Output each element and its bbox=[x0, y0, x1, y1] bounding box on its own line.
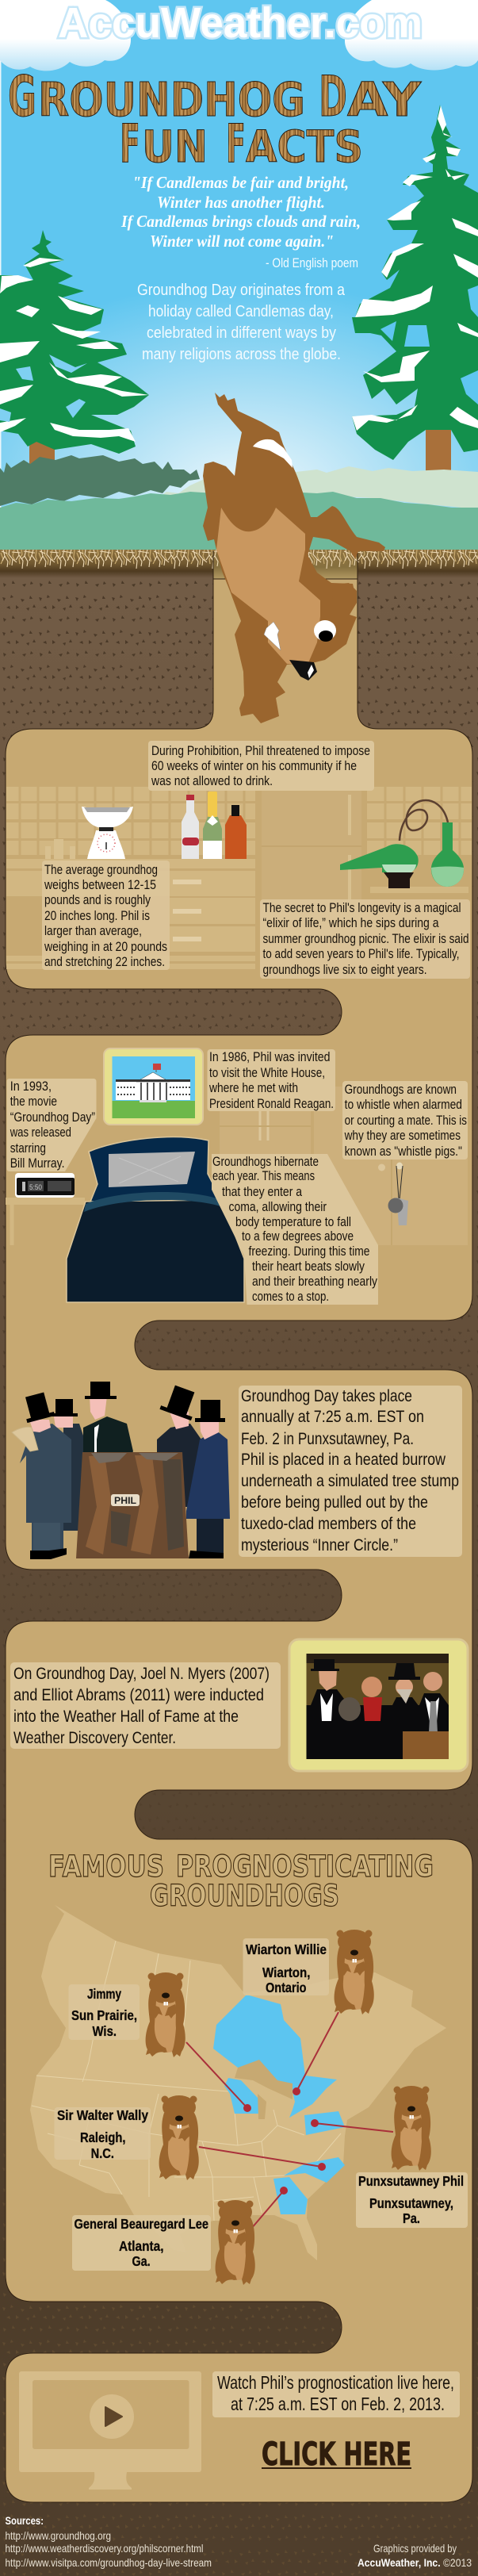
title: Groundhog Day Fun Facts: ACTS bbox=[246, 121, 363, 172]
label: Sir Walter Wally bbox=[54, 2107, 151, 2161]
picture: White House bbox=[104, 1048, 203, 1125]
text box: watch live bbox=[212, 2371, 460, 2417]
label: Punxsutawney Phil bbox=[356, 2172, 468, 2228]
Wisconsin bbox=[224, 2078, 262, 2114]
text box: elixir of life: “elixir of life,” which he sips during a bbox=[263, 916, 439, 930]
cloud: top left bbox=[0, 0, 131, 71]
quote: Old English poem: - Old English poem bbox=[266, 255, 358, 270]
text box: average groundhog bbox=[42, 861, 170, 970]
icon: whistle bbox=[388, 1163, 408, 1225]
text box: average groundhog: 20 inches long. Phil is bbox=[44, 909, 150, 923]
text box: Hall of Fame bbox=[10, 1662, 281, 1749]
text box: prohibition: was not allowed to drink. bbox=[151, 774, 273, 788]
credit: Graphics provided by bbox=[373, 2542, 457, 2555]
text box: Hall of Fame: into the Weather Hall of Fame at the bbox=[13, 1707, 239, 1726]
heading: Famous Prognosticating Groundhogs bbox=[48, 1850, 434, 1913]
tree: right bbox=[352, 105, 478, 476]
text box: average groundhog: and stretching 22 inches. bbox=[44, 955, 165, 969]
Great Lakes bbox=[235, 2060, 293, 2099]
label: Jimmy: Sun Prairie, bbox=[71, 2007, 137, 2023]
groundhog: Punxsutawney Phil bbox=[392, 2086, 431, 2171]
sky background bbox=[0, 0, 478, 555]
title: Groundhog Day Fun Facts: AY bbox=[347, 72, 422, 127]
sources: http://www.visitpa.com/groundhog-day-live-stream bbox=[5, 2556, 212, 2569]
text box: movie 1993: Bill Murray. bbox=[10, 1156, 65, 1171]
illustration: Inner Circle men and stump bbox=[12, 1382, 230, 1559]
icon: elixir flasks bbox=[340, 800, 464, 888]
text box: elixir of life bbox=[260, 899, 470, 979]
hog tail tuft bbox=[253, 439, 293, 468]
Pennsylvania bbox=[304, 2111, 345, 2135]
title: Groundhog Day Fun Facts: D bbox=[319, 64, 347, 129]
intro text: celebrated in different ways by bbox=[147, 324, 336, 342]
man 1 with scroll bbox=[12, 1391, 71, 1559]
title: Groundhog Day Fun Facts: G bbox=[8, 64, 36, 129]
text box: movie 1993: “Groundhog Day” bbox=[10, 1110, 95, 1125]
hills bbox=[0, 455, 478, 551]
bed bbox=[67, 1137, 244, 1302]
text box: whistle pigs bbox=[342, 1081, 468, 1160]
label: General Beauregard Lee: General Beauregard Lee bbox=[75, 2216, 208, 2232]
groundhog: Jimmy bbox=[146, 1972, 185, 2057]
text box: hibernation: to a few degrees above bbox=[242, 1229, 354, 1244]
label: Jimmy: Wis. bbox=[92, 2023, 117, 2039]
text box: movie 1993: In 1993, bbox=[10, 1079, 52, 1094]
man 3 center bbox=[83, 1382, 133, 1455]
text box: average groundhog: larger than average, bbox=[44, 924, 142, 938]
icon: video monitor bbox=[19, 2371, 201, 2490]
label: Wiarton Willie bbox=[243, 1938, 329, 1995]
text box: White House 1986: where he met with bbox=[208, 1081, 298, 1095]
text box: average groundhog: The average groundhog bbox=[44, 863, 158, 877]
sources bbox=[5, 2515, 212, 2569]
bedroom background furniture bbox=[6, 1087, 468, 1245]
title: Groundhog Day Fun Facts: UN bbox=[142, 121, 208, 172]
label: Wiarton Willie: Wiarton Willie bbox=[246, 1942, 327, 1957]
link: click here: CLICK HERE bbox=[262, 2436, 411, 2473]
text box: White House 1986: President Ronald Reagan. bbox=[209, 1097, 334, 1111]
heading: Famous Prognosticating Groundhogs: GROUNDHOGS bbox=[150, 1879, 339, 1913]
label: Jimmy: Jimmy bbox=[87, 1986, 121, 2002]
text box: Groundhog Day takes place: before being pulled out by the bbox=[241, 1493, 428, 1512]
intro text bbox=[137, 282, 346, 363]
text box: hibernation: Groundhogs hibernate bbox=[212, 1155, 319, 1169]
label: General Beauregard Lee: Ga. bbox=[132, 2253, 151, 2269]
quote: Old English poem bbox=[120, 173, 361, 270]
text box: hibernation bbox=[212, 1154, 378, 1305]
label: PHIL: PHIL bbox=[114, 1495, 136, 1506]
shaft walls bbox=[213, 551, 358, 580]
photo: Hall of Fame induction bbox=[289, 1639, 468, 1771]
text box: prohibition: During Prohibition, Phil threatened to impose bbox=[151, 744, 370, 758]
sources: http://www.weatherdiscovery.org/philscorner.html bbox=[5, 2542, 203, 2555]
text box: Groundhog Day takes place: Feb. 2 in Punxsutawney, Pa. bbox=[241, 1429, 414, 1448]
text box: hibernation: comes to a stop. bbox=[252, 1290, 329, 1304]
text box: White House 1986: to visit the White House, bbox=[209, 1066, 325, 1080]
AccuWeather logo: AccuWeather.com bbox=[58, 0, 423, 47]
icon: kitchen scale bbox=[82, 807, 133, 859]
text box: average groundhog: weighs between 12-15 bbox=[44, 878, 156, 892]
kitchen background bbox=[6, 785, 472, 969]
label: Sir Walter Wally: Raleigh, bbox=[80, 2129, 125, 2145]
text box: hibernation: coma, allowing their bbox=[228, 1200, 327, 1214]
groundhog Phil diving into burrow bbox=[203, 393, 385, 723]
groundhog: Wiarton Willie bbox=[335, 1930, 374, 2014]
text box: elixir of life: groundhogs live six to eight years. bbox=[263, 963, 426, 977]
label: General Beauregard Lee: Atlanta, bbox=[119, 2238, 163, 2254]
text box: hibernation: their heart beats slowly bbox=[252, 1259, 365, 1274]
intro text: Groundhog Day originates from a bbox=[137, 282, 346, 299]
callout lines and location dots bbox=[186, 2012, 393, 2229]
title: Groundhog Day Fun Facts: F bbox=[120, 113, 140, 174]
hog ear bbox=[332, 583, 357, 611]
credit bbox=[358, 2542, 472, 2569]
credit: AccuWeather, Inc. ©2013 bbox=[358, 2556, 472, 2569]
quote: Old English poem: "If Candlemas be fair and bright, bbox=[132, 173, 349, 192]
text box: White House 1986 bbox=[208, 1049, 335, 1111]
Lake Michigan bbox=[258, 2094, 266, 2119]
label: Wiarton Willie: Wiarton, bbox=[262, 1965, 311, 1980]
quote: Old English poem: Winter will not come again." bbox=[150, 232, 334, 251]
icon: alarm clock: 5:50 bbox=[29, 1183, 42, 1191]
intro text: many religions across the globe. bbox=[142, 346, 341, 363]
text box: average groundhog: pounds and is roughly bbox=[44, 893, 151, 907]
text box: Hall of Fame: Weather Discovery Center. bbox=[13, 1728, 176, 1747]
sources: Sources: bbox=[5, 2515, 44, 2527]
North Carolina bbox=[284, 2157, 345, 2183]
cloud: top right bbox=[345, 0, 478, 70]
man 4 bbox=[157, 1383, 201, 1507]
text box: average groundhog: weighing in at 20 pounds bbox=[44, 940, 167, 954]
text box: prohibition: 60 weeks of winter on his community if he bbox=[151, 759, 357, 773]
text box: White House 1986: In 1986, Phil was invited bbox=[209, 1050, 330, 1064]
label: Punxsutawney Phil: Pa. bbox=[403, 2210, 420, 2226]
text box: whistle pigs: Groundhogs are known bbox=[345, 1083, 457, 1097]
text box: Groundhog Day takes place: annually at 7:25 a.m. EST on bbox=[241, 1407, 424, 1426]
text box: movie 1993: the movie bbox=[10, 1094, 57, 1109]
label: Sir Walter Wally: Sir Walter Wally bbox=[57, 2107, 148, 2123]
text box: Hall of Fame: On Groundhog Day, Joel N. Myers (2007) bbox=[13, 1664, 270, 1683]
icon: bottles bbox=[182, 792, 247, 859]
heading: Famous Prognosticating Groundhogs: FAMOUS bbox=[48, 1850, 164, 1884]
label: Wiarton Willie: Ontario bbox=[266, 1980, 306, 1995]
hog eye bbox=[314, 620, 336, 642]
title: Groundhog Day Fun Facts bbox=[8, 64, 422, 174]
text box: hibernation: and their breathing nearly bbox=[252, 1275, 378, 1289]
text box: Groundhog Day takes place bbox=[239, 1386, 462, 1557]
text box: hibernation: body temperature to fall bbox=[235, 1215, 351, 1229]
text box: movie 1993 bbox=[6, 1079, 97, 1171]
burrow tunnels bbox=[6, 579, 472, 2502]
text box: hibernation: freezing. During this time bbox=[249, 1244, 369, 1259]
quote: Old English poem: If Candlemas brings clouds and rain, bbox=[120, 212, 361, 231]
label: Punxsutawney Phil: Punxsutawney, bbox=[369, 2195, 453, 2211]
label: Jimmy bbox=[68, 1984, 140, 2040]
sources: http://www.groundhog.org bbox=[5, 2529, 111, 2542]
map: North America bbox=[30, 1905, 446, 2260]
text box: Groundhog Day takes place: tuxedo-clad members of the bbox=[241, 1514, 416, 1533]
title: Groundhog Day Fun Facts: F bbox=[226, 113, 246, 174]
tree stump bbox=[76, 1452, 189, 1558]
man 2 bbox=[51, 1399, 87, 1531]
intro text: holiday called Candlemas day, bbox=[148, 303, 334, 320]
text box: Groundhog Day takes place: mysterious “Inner Circle.” bbox=[241, 1535, 398, 1554]
tree: left bbox=[0, 230, 149, 466]
text box: movie 1993: starring bbox=[10, 1141, 46, 1156]
title: Groundhog Day Fun Facts: ROUNDHOG bbox=[38, 72, 305, 127]
icon: alarm clock bbox=[15, 1173, 75, 1198]
hog nose bbox=[289, 660, 317, 680]
man 5 bbox=[186, 1400, 230, 1558]
groundhog: Sir Walter Wally bbox=[159, 2095, 199, 2180]
quote: Old English poem: Winter has another flight. bbox=[157, 193, 325, 212]
Ontario bbox=[213, 1995, 337, 2118]
soil bbox=[0, 550, 478, 2576]
Georgia bbox=[273, 2177, 308, 2214]
hog teeth bbox=[264, 622, 281, 650]
text box: prohibition bbox=[148, 741, 374, 791]
text box: hibernation: each year. This means bbox=[212, 1169, 315, 1183]
label: Sir Walter Wally: N.C. bbox=[91, 2145, 114, 2161]
text box: hibernation: that they enter a bbox=[222, 1185, 303, 1199]
text box: Hall of Fame: and Elliot Abrams (2011) were inducted bbox=[13, 1685, 264, 1704]
text box: Groundhog Day takes place: Groundhog Day takes place bbox=[241, 1386, 412, 1405]
text box: movie 1993: was released bbox=[10, 1125, 71, 1140]
groundhog: General Beauregard Lee bbox=[216, 2200, 255, 2285]
label: General Beauregard Lee bbox=[72, 2215, 211, 2271]
